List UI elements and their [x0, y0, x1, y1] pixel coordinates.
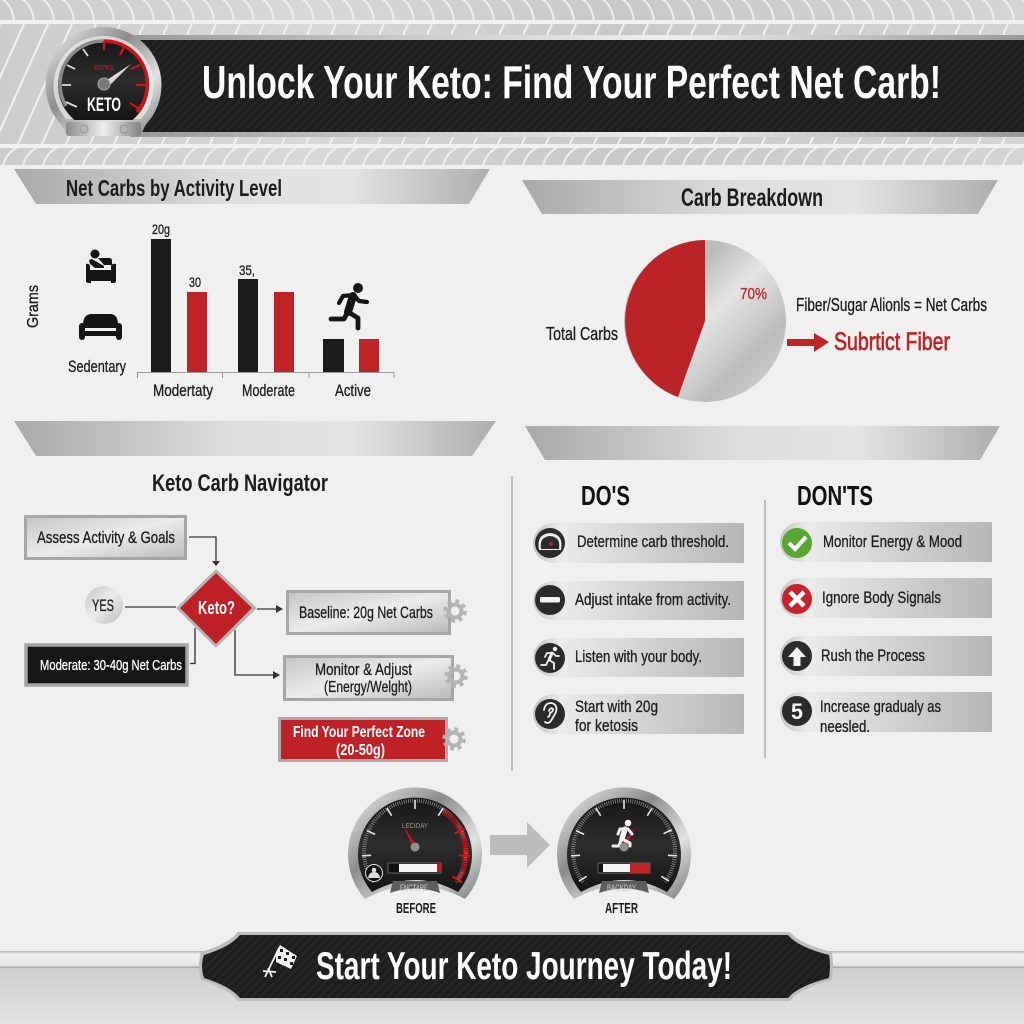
bar chart: Modertaty [153, 381, 213, 400]
bar chart: Moderate [242, 381, 295, 400]
panel: after gauge [557, 787, 691, 917]
after label: AFTER [605, 900, 638, 917]
step: assess: Assess Activity & Goals [37, 528, 175, 547]
yes node [85, 586, 123, 624]
don't item 4 [780, 692, 992, 736]
don't item 4: 5 [791, 699, 803, 724]
icon: person on couch [86, 250, 116, 283]
heading [522, 180, 998, 214]
footer plaque [199, 932, 833, 1001]
panel: keto carb navigator [14, 421, 496, 760]
bar chart: 35, [239, 262, 255, 278]
gauge dial: ENCTARE [400, 883, 428, 893]
arrow: before to after [490, 822, 550, 868]
step: perfect zone: Find Your Perfect Zone [293, 724, 425, 741]
do item 4 [533, 694, 744, 735]
don't item 2: Ignore Body Signals [822, 588, 941, 607]
icon: keto gauge [45, 27, 162, 136]
icon: gear [446, 666, 466, 686]
icon: keto gauge: EDFKS [94, 65, 114, 72]
don't item 2 [780, 578, 992, 618]
icon: sofa [79, 314, 122, 340]
don't item 1: Monitor Energy & Mood [823, 532, 962, 551]
arrow [787, 333, 829, 352]
connector lines [125, 537, 283, 679]
do item 1 [533, 523, 744, 563]
footer band [0, 951, 1024, 1024]
heading: Net Carbs by Activity Level [66, 175, 282, 201]
pie chart: 70% [740, 286, 767, 303]
heading: Keto Carb Navigator [152, 470, 328, 497]
header tread background [0, 0, 1024, 165]
header banner [130, 35, 1024, 137]
do item 3: Listen with your body. [575, 647, 702, 666]
total carbs label: Total Carbs [546, 324, 618, 344]
bar chart: Active [335, 381, 371, 400]
step: monitor: Monitor & Adjust [315, 660, 412, 679]
icon: gear [444, 729, 464, 749]
pie chart [624, 240, 786, 402]
step: perfect zone: (20-50g) [336, 742, 385, 759]
do item 4: for ketosis [575, 716, 638, 735]
do item 2: Adjust intake from activity. [575, 590, 731, 609]
gauge dial: BACKDAY [607, 883, 636, 893]
don'ts heading: DON'TS [797, 480, 873, 511]
decision diamond: Keto? [198, 598, 235, 618]
icon: keto gauge: KETO [87, 95, 121, 116]
decision diamond [176, 569, 257, 648]
step: perfect zone [280, 718, 446, 760]
gauge dial [348, 787, 482, 899]
bar chart: 20g [152, 221, 170, 237]
step: assess [26, 516, 186, 558]
panel: carb breakdown [522, 180, 998, 402]
don't item 3: Rush the Process [821, 646, 925, 665]
do item 4: Start with 20g [575, 697, 658, 716]
do's heading: DO'S [581, 480, 630, 511]
do item 2 [534, 581, 744, 620]
don't item 4: Increase gradualy as [820, 697, 941, 716]
y axis label: Grams [25, 285, 42, 328]
icon: runner [331, 283, 367, 328]
bar chart [138, 221, 394, 400]
yes node: YES [92, 596, 114, 615]
step: monitor: (Energy/Welght) [324, 679, 412, 696]
heading [14, 169, 490, 204]
panel: do's and don'ts [511, 426, 1000, 771]
empty banner [14, 421, 496, 456]
icon: checkered flag [263, 945, 297, 977]
divider [511, 476, 513, 771]
panel: net carbs by activity level [14, 169, 490, 400]
before label: BEFORE [396, 900, 436, 917]
icon: gear [445, 601, 465, 621]
don't item 4: neesled. [820, 717, 870, 736]
step: baseline [288, 592, 450, 634]
step: moderate: Moderate: 30-40g Net Carbs [40, 657, 182, 674]
call to action: Start Your Keto Journey Today! [316, 945, 732, 988]
empty banner [525, 426, 1000, 460]
step: moderate [26, 645, 187, 685]
subtract fiber label: Subrtict Fiber [834, 328, 950, 356]
bar chart: 30 [189, 274, 201, 290]
heading: Carb Breakdown [681, 184, 823, 212]
do item 1: Determine carb threshold. [577, 532, 729, 551]
don't item 1 [780, 522, 992, 562]
divider [764, 500, 766, 758]
don't item 3 [780, 636, 992, 676]
do item 3 [534, 638, 744, 677]
step: monitor [284, 656, 452, 700]
gauge dial: LECIDAY [402, 823, 428, 830]
step: baseline: Baseline: 20g Net Carbs [299, 603, 433, 622]
panel: before gauge [348, 787, 482, 917]
sedentary label: Sedentary [68, 357, 126, 376]
